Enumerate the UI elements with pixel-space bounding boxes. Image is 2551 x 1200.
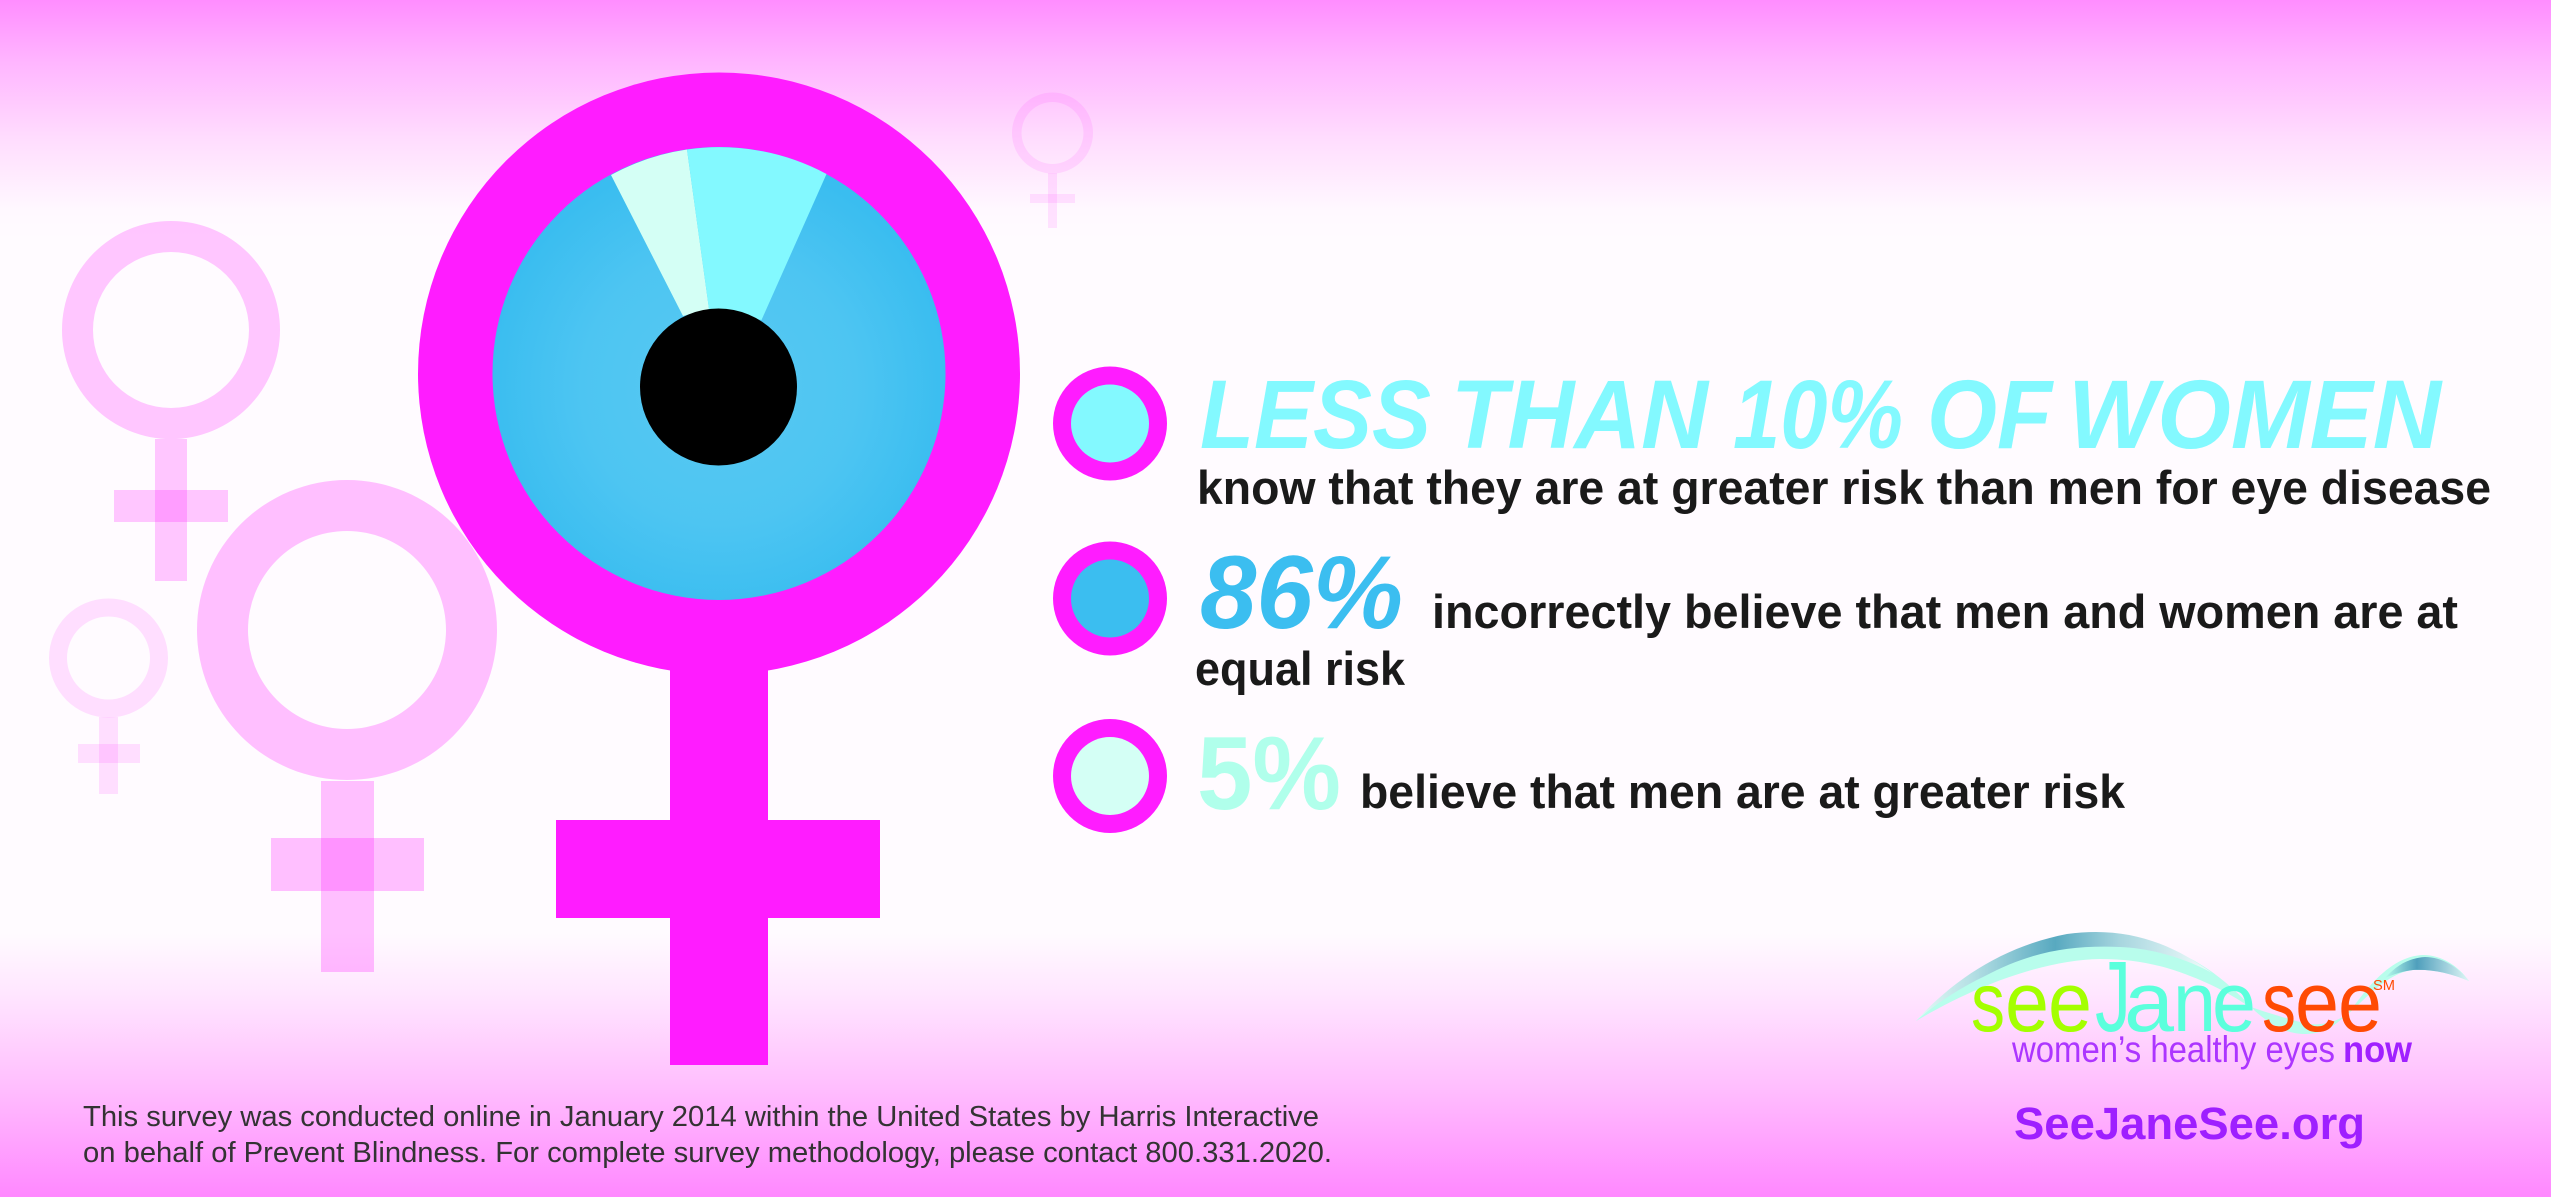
website link: SeeJaneSee.org (2014, 1098, 2365, 1149)
logo: See Jane See (1916, 932, 2469, 1070)
wedge: less than ten percent (687, 147, 826, 320)
description: equal risk (1195, 642, 1406, 695)
heading: 10% (1733, 360, 1903, 469)
Jane: a (2124, 955, 2174, 1049)
see: e (2048, 955, 2092, 1049)
survey footnote (83, 1101, 1332, 1169)
bullet (1053, 542, 1167, 656)
icon: main female symbol with eye (418, 72, 1020, 1065)
heading: WOMEN (2068, 360, 2443, 469)
see (1971, 955, 2092, 1049)
Jane (2095, 941, 2256, 1053)
logo tagline: now (2343, 1029, 2412, 1070)
Jane: e (2212, 955, 2256, 1049)
see: s (1971, 955, 2005, 1049)
description (1195, 585, 2458, 695)
logo swoosh (1916, 932, 2469, 1034)
Jane: n (2173, 955, 2216, 1049)
icon: large female symbol left (62, 221, 280, 581)
see: e (2005, 955, 2049, 1049)
female symbol stem and crossbar (556, 660, 880, 1065)
heading: THAN (1451, 360, 1710, 469)
female symbol ring (418, 72, 1020, 674)
stat row: 5 percent (1053, 716, 2126, 833)
logo wordmark (1971, 941, 2395, 1053)
description: incorrectly believe that men and women are at (1432, 585, 2458, 638)
icon: medium female symbol (197, 480, 497, 972)
heading: OF (1927, 360, 2055, 469)
stat row: 86 percent (1053, 535, 2458, 695)
see: e (2295, 955, 2339, 1049)
see (2262, 955, 2382, 1049)
see: s (2262, 955, 2296, 1049)
bullet (1053, 366, 1167, 480)
heading: LESS (1200, 360, 1431, 469)
description: know that they are at greater risk than men for eye disease (1197, 461, 2491, 514)
icon: small female symbol top right (1012, 92, 1093, 228)
description: believe that men are at greater risk (1360, 765, 2126, 818)
service mark: SM (2373, 978, 2395, 994)
figure: 5% (1197, 716, 1341, 832)
logo tagline: women’s healthy eyes (2011, 1029, 2335, 1070)
see: e (2338, 955, 2382, 1049)
wedge: five percent (611, 150, 709, 316)
survey footnote: This survey was conducted online in January 2014 within the United States by Harris Interactive (83, 1101, 1319, 1133)
eye pupil (640, 308, 797, 466)
eye iris (492, 147, 946, 600)
bullet (1053, 719, 1167, 833)
heading (1200, 360, 2443, 469)
icon: small female symbol lower left (49, 599, 168, 794)
survey footnote: on behalf of Prevent Blindness. For complete survey methodology, please contact 800.331.2020. (83, 1137, 1332, 1169)
Jane: J (2095, 941, 2131, 1053)
figure: 86% (1200, 535, 1403, 651)
stat row: less than 10 percent (1053, 360, 2491, 514)
